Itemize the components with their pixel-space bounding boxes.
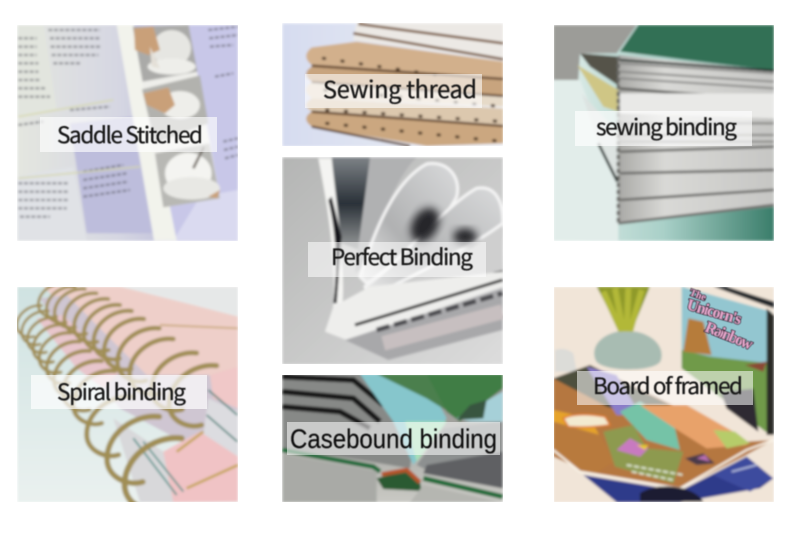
book cover title: The bbox=[688, 287, 708, 304]
panel: sewing thread bbox=[282, 23, 503, 147]
label: Spiral binding: Spiral binding bbox=[57, 375, 186, 407]
label: Board of framed: Board of framed bbox=[593, 369, 743, 401]
label: Perfect Binding: Perfect Binding bbox=[331, 240, 473, 272]
label: Sewing thread: Sewing thread bbox=[323, 71, 477, 105]
label: Saddle Stitched: Saddle Stitched bbox=[57, 118, 203, 150]
label: Casebound binding: Casebound binding bbox=[290, 424, 497, 454]
photo: stack of section-sewn books bbox=[553, 25, 774, 241]
panel: spiral binding bbox=[17, 283, 238, 511]
panel: saddle stitched bbox=[17, 25, 238, 241]
panel: board of framed bbox=[553, 287, 774, 503]
book cover title: Rainbow bbox=[703, 319, 756, 354]
photo: fanned perfect bound book bbox=[282, 157, 503, 365]
panel: casebound binding bbox=[282, 374, 503, 502]
book cover title bbox=[685, 287, 756, 354]
photo: stacked kraft booklets bbox=[282, 23, 503, 147]
photo: spiral bound notebooks with gold coils bbox=[17, 283, 238, 511]
book cover title: Unicorn's bbox=[685, 297, 743, 328]
label: sewing binding: sewing binding bbox=[596, 110, 737, 142]
panel: perfect binding bbox=[282, 157, 503, 365]
photo: children's board books and vase bbox=[553, 287, 774, 503]
panel: sewing binding bbox=[553, 25, 774, 241]
label: Spiral binding bbox=[31, 375, 207, 409]
photo: open magazine with cake steps bbox=[17, 25, 238, 241]
photo: open hardcover with green case bbox=[282, 374, 503, 502]
label: Perfect Binding bbox=[308, 240, 486, 277]
